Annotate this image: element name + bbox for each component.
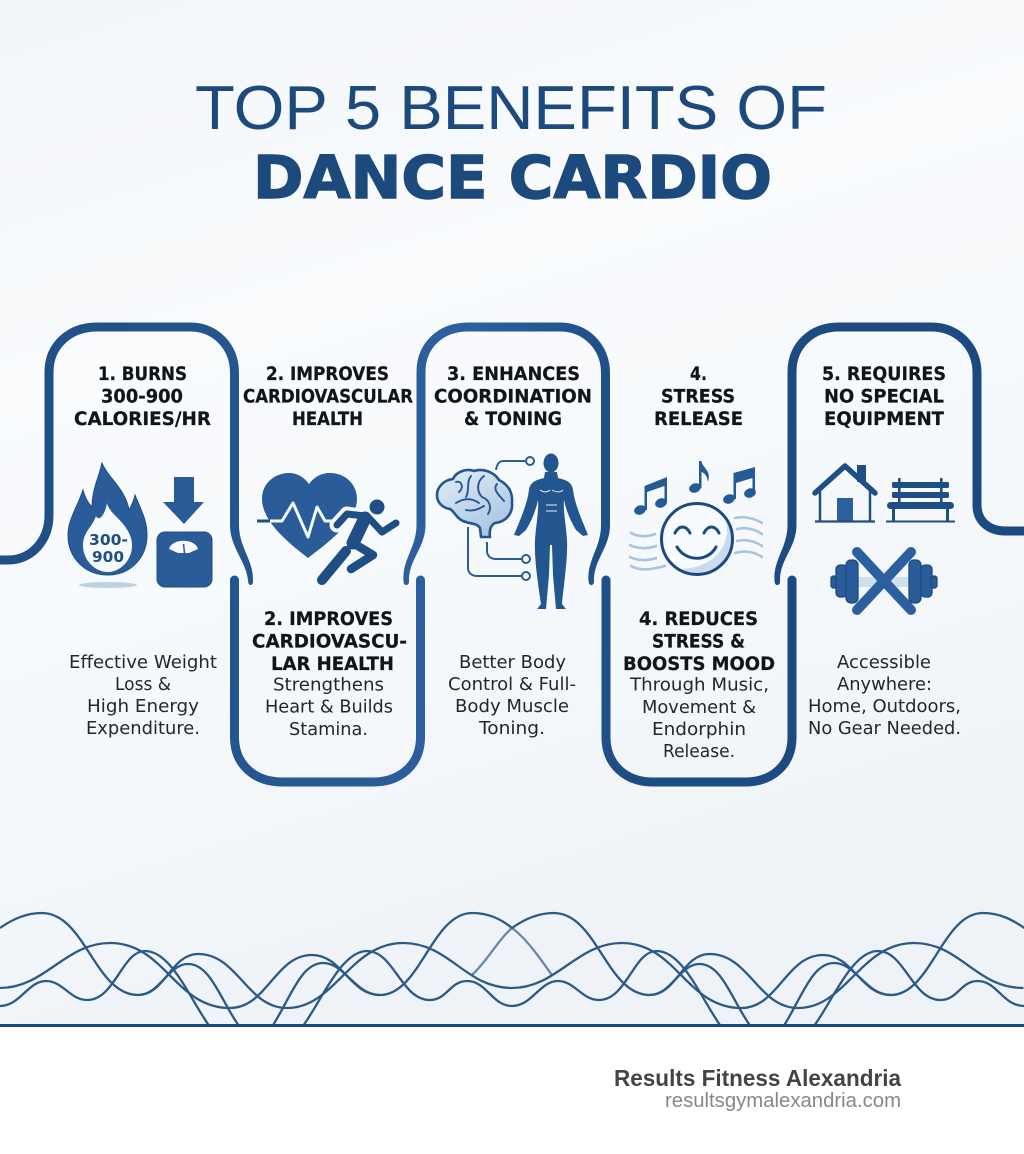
panel 1: burns calories xyxy=(68,363,217,739)
panel 3 heading: 3. ENHANCES xyxy=(447,363,580,385)
panel 3 description xyxy=(448,653,576,739)
panel 5 heading xyxy=(822,363,946,430)
panel 4: stress release xyxy=(623,363,775,762)
panel 3 description: Control & Full- xyxy=(448,675,576,695)
panel 4 lower text: Through Music, xyxy=(629,676,769,696)
title: DANCE CARDIO xyxy=(253,143,772,212)
panel 1 heading xyxy=(74,363,211,430)
panel 3 description: Better Body xyxy=(459,653,566,673)
panel 2 lower text: LAR HEALTH xyxy=(271,653,394,675)
panel 5: no special equipment xyxy=(808,363,961,739)
panel 2: cardiovascular health xyxy=(243,363,413,740)
icon: sound waves xyxy=(630,517,762,569)
icon: smiling face xyxy=(662,504,732,574)
title xyxy=(195,74,827,212)
panel 4 lower text: STRESS & xyxy=(652,630,745,652)
icon: flame with 300-900 xyxy=(68,463,147,588)
baseline rule xyxy=(0,1024,1024,1027)
icon: house xyxy=(815,465,875,522)
panel 4 top heading: 4. xyxy=(690,363,707,385)
footer branding: resultsgymalexandria.com xyxy=(665,1090,901,1112)
icon: crossed-out dumbbell xyxy=(831,552,937,610)
panel 4 lower text: 4. REDUCES xyxy=(639,608,758,630)
panel 2 lower text: Strengthens xyxy=(273,676,384,696)
icon: flame with 300-900: 900 xyxy=(92,548,124,566)
panel 5 heading: NO SPECIAL xyxy=(824,386,944,408)
panel 2 top heading: CARDIOVASCULAR xyxy=(243,386,413,408)
panel 5 description: Anywhere: xyxy=(837,675,932,695)
panel 4 top heading xyxy=(654,363,743,430)
panel 4 top heading: STRESS xyxy=(661,386,735,408)
panel 2 lower text: Heart & Builds xyxy=(265,698,393,718)
panel 5 description: Accessible xyxy=(837,653,931,673)
panel 3 heading: & TONING xyxy=(464,408,562,430)
panel 4 lower text: Movement & xyxy=(642,698,756,718)
panel 4 top heading: RELEASE xyxy=(654,408,743,430)
panel 1 description xyxy=(69,653,217,739)
panel 3 heading: COORDINATION xyxy=(434,386,592,408)
panel 1 heading: CALORIES/HR xyxy=(74,408,211,430)
panel 2 lower text: CARDIOVASCU- xyxy=(252,630,407,652)
panel 2 top heading xyxy=(243,363,413,430)
icon: music notes xyxy=(633,461,757,516)
panel 3: coordination and toning xyxy=(434,363,592,739)
panel 1 heading: 300-900 xyxy=(101,386,183,408)
panel 1 description: Effective Weight xyxy=(69,653,217,673)
panel 3 heading xyxy=(434,363,592,430)
icon: park bench xyxy=(886,478,955,522)
panel 1 description: High Energy xyxy=(87,697,199,717)
sound wave lines along the bottom xyxy=(0,913,1024,1030)
panel 3 description: Body Muscle xyxy=(455,697,569,717)
panel 5 description: No Gear Needed. xyxy=(808,719,961,739)
panel 4 lower text: Endorphin xyxy=(652,720,746,740)
panel 5 description: Home, Outdoors, xyxy=(808,697,961,717)
panel 2 top heading: 2. IMPROVES xyxy=(266,363,389,385)
panel 4 lower text: BOOSTS MOOD xyxy=(623,653,775,675)
panel 2 lower text xyxy=(252,608,407,740)
panel 1 description: Loss & xyxy=(115,675,171,695)
panel 5 heading: EQUIPMENT xyxy=(824,408,944,430)
icon: human body xyxy=(514,454,588,609)
title: TOP 5 BENEFITS OF xyxy=(195,74,827,143)
footer branding: Results Fitness Alexandria xyxy=(614,1065,901,1091)
icon: heart with pulse and runner xyxy=(257,473,396,580)
icon: connector lines xyxy=(468,457,534,580)
panel 5 description xyxy=(808,653,961,739)
panel 2 top heading: HEALTH xyxy=(292,408,363,430)
serpentine ribbon connecting the five panels xyxy=(0,327,1024,782)
panel 4 lower text: Release. xyxy=(663,742,735,762)
panel 2 lower text: Stamina. xyxy=(289,720,368,740)
icon: brain xyxy=(437,470,512,537)
panel 3 description: Toning. xyxy=(478,719,545,739)
panel 1 heading: 1. BURNS xyxy=(98,363,187,385)
icon: flame with 300-900: 300- xyxy=(89,531,128,549)
panel 2 lower text: 2. IMPROVES xyxy=(264,608,393,630)
panel 4 lower text xyxy=(623,608,775,762)
icon: arrow down onto scale xyxy=(157,477,212,587)
panel 1 description: Expenditure. xyxy=(86,719,200,739)
footer branding xyxy=(614,1065,901,1112)
panel 5 heading: 5. REQUIRES xyxy=(822,363,946,385)
